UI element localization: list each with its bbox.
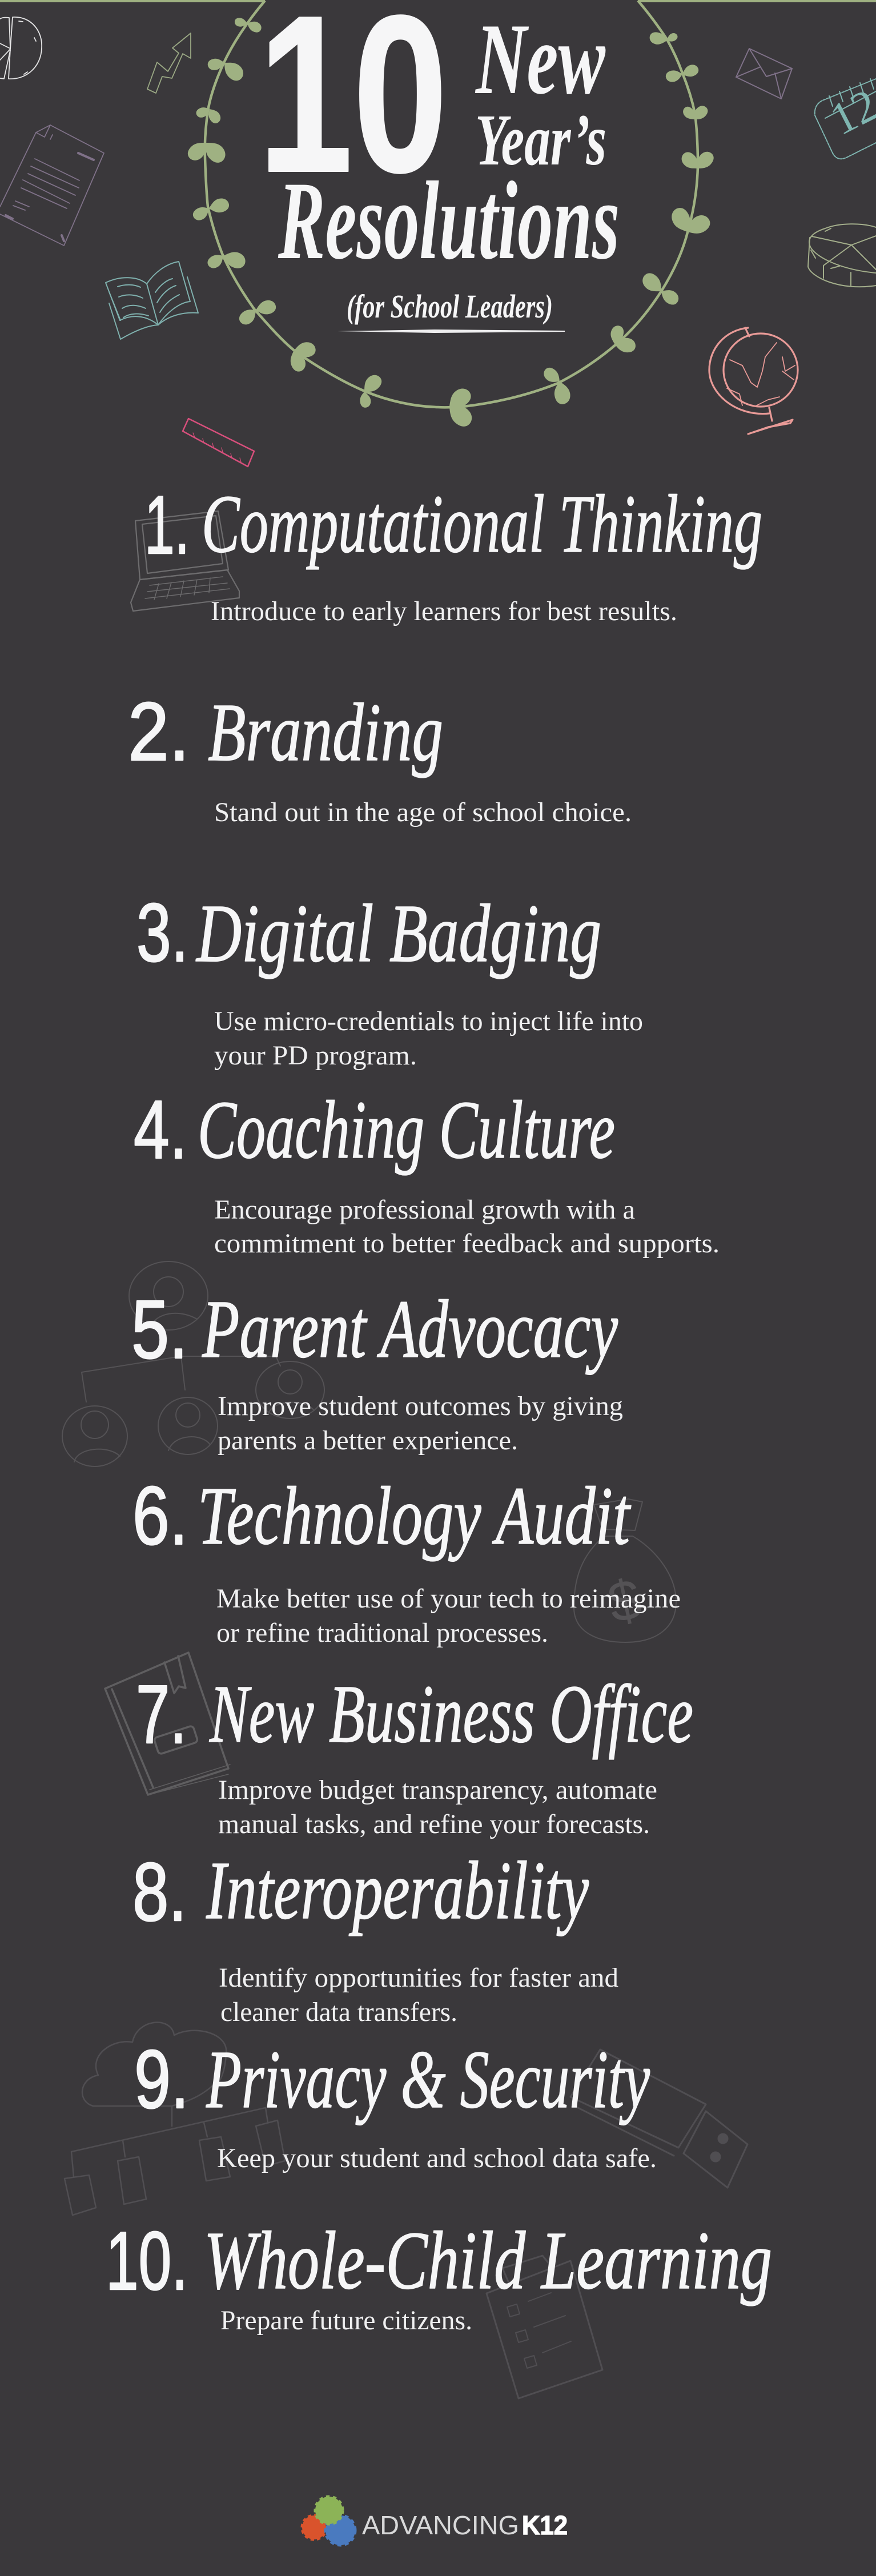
icon: 3D pie chart — [808, 224, 876, 287]
resolution 5: Improve student outcomes by giving — [218, 1391, 623, 1421]
icon: clipboard — [487, 2256, 602, 2398]
resolution 5: Parent Advocacy — [202, 1284, 618, 1375]
resolution 2: Branding — [208, 687, 443, 778]
title: Year’s — [475, 99, 606, 180]
resolution 2 — [128, 685, 632, 827]
icon: document — [0, 125, 104, 246]
resolution 8: cleaner data transfers. — [220, 1997, 457, 2027]
resolution 6: Make better use of your tech to reimagine — [216, 1584, 681, 1614]
icons: parent network — [62, 1261, 324, 1466]
resolution 9 — [134, 2033, 657, 2173]
resolution 6 — [132, 1469, 681, 1648]
resolution 4: Coaching Culture — [198, 1084, 615, 1176]
resolution 4: Encourage professional growth with a — [214, 1195, 635, 1225]
title — [258, 0, 620, 333]
resolution 6: 6. — [132, 1469, 188, 1562]
resolution 3: Use micro-credentials to inject life into — [214, 1006, 643, 1036]
icon: laptop — [131, 511, 239, 611]
resolution 3: Digital Badging — [195, 888, 601, 979]
resolution 5: parents a better experience. — [218, 1425, 518, 1456]
resolution 6: or refine traditional processes. — [216, 1618, 548, 1648]
title: (for School Leaders) — [347, 288, 553, 325]
icon: money bag — [574, 1499, 676, 1642]
logo: Advancing K12 — [302, 2497, 568, 2545]
icon: envelope — [736, 49, 792, 99]
resolution 8: Identify opportunities for faster and — [219, 1963, 618, 1993]
resolution 7: manual tasks, and refine your forecasts. — [218, 1809, 650, 1839]
icon: pie chart top left — [0, 17, 42, 79]
resolution 3: 3. — [136, 886, 188, 979]
icon: globe — [709, 328, 798, 434]
icon: ruler — [183, 419, 254, 467]
logo: Advancing K12: ADVANCING — [362, 2510, 519, 2540]
logo: Advancing K12: K12 — [522, 2510, 568, 2540]
resolution 8 — [132, 1845, 618, 2027]
resolution 8: Interoperability — [206, 1845, 589, 1936]
resolution 1 — [144, 479, 762, 626]
resolution 4: commitment to better feedback and supports. — [214, 1228, 720, 1259]
resolution 5 — [131, 1283, 623, 1456]
wreath frame — [0, 1, 876, 430]
resolution 6: Technology Audit — [198, 1470, 632, 1562]
icon: usb drive — [570, 2049, 748, 2188]
resolution 10 — [106, 2215, 772, 2336]
icon: notebook — [105, 1653, 230, 1795]
icon: money bag: $ — [602, 1566, 647, 1635]
resolution 8: 8. — [132, 1846, 187, 1938]
icon: cloud hierarchy — [65, 2023, 285, 2215]
resolution 1: 1. — [144, 479, 190, 571]
resolution 5: 5. — [131, 1283, 188, 1376]
resolution 7 — [136, 1668, 693, 1839]
resolution 2: 2. — [128, 685, 190, 778]
title: Resolutions — [278, 159, 620, 283]
resolution 7: Improve budget transparency, automate — [218, 1775, 657, 1805]
resolution 9: 9. — [134, 2033, 189, 2125]
resolution 3 — [136, 886, 643, 1071]
resolution 9: Privacy & Security — [206, 2034, 650, 2125]
resolution 7: 7. — [136, 1668, 187, 1761]
resolution 4: 4. — [134, 1083, 187, 1176]
resolution 2: Stand out in the age of school choice. — [214, 797, 632, 827]
resolution 9: Keep your student and school data safe. — [217, 2143, 657, 2173]
resolution 4 — [134, 1083, 720, 1259]
resolution 7: New Business Office — [209, 1669, 693, 1760]
title: New — [475, 2, 606, 115]
resolution 1: Introduce to early learners for best results. — [211, 596, 677, 626]
icon: open book — [106, 262, 198, 339]
resolution 10: Prepare future citizens. — [220, 2305, 472, 2336]
resolution 10: 10. — [106, 2215, 188, 2307]
icon: rising arrow — [147, 33, 191, 93]
resolution 3: your PD program. — [214, 1040, 417, 1071]
